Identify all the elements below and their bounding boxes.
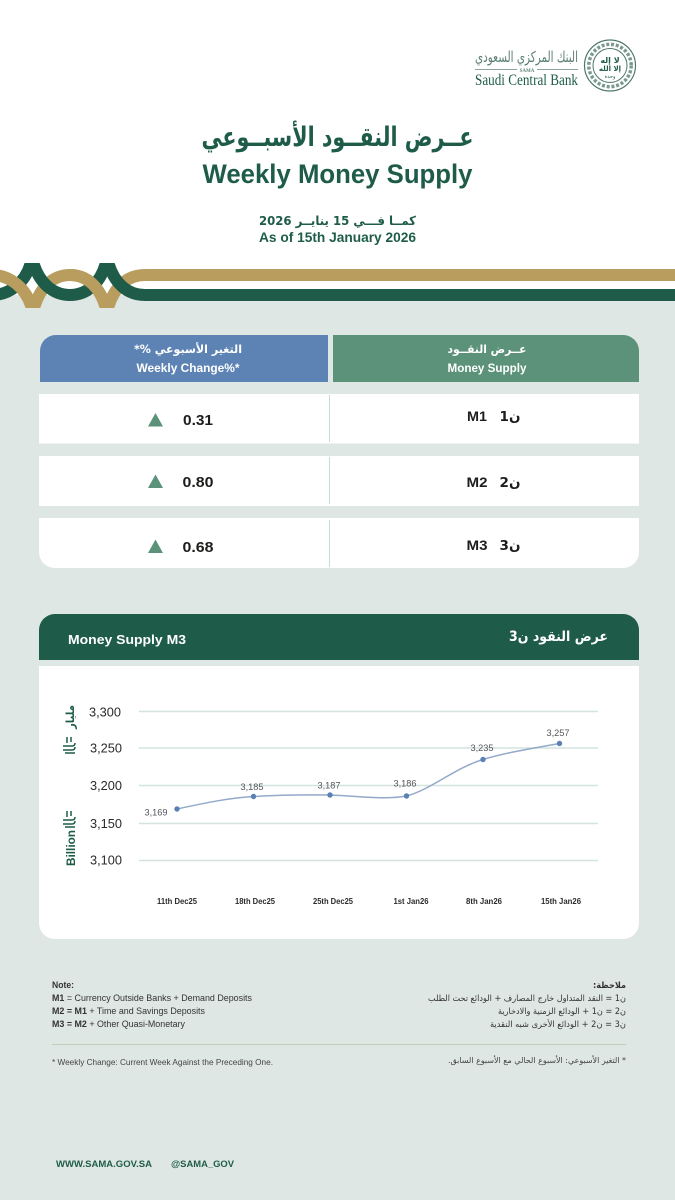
- note: Arabic: [428, 981, 626, 1030]
- grid lines and y labels: 3,150: [90, 816, 122, 831]
- chart header bar: عرض النقود ن3: [509, 629, 608, 645]
- date: As of 15th January 2026: [259, 230, 416, 245]
- data labels: [144, 728, 570, 818]
- table row: M1: 0.31: [183, 413, 213, 429]
- table row: M3: ن3: [500, 538, 520, 554]
- note: Arabic: ن2 = ن1 + الودائع الزمنية والادخارية: [498, 1007, 626, 1017]
- note: Arabic: ن1 = النقد المتداول خارج المصارف + الودائع تحت الطلب: [428, 994, 626, 1004]
- chart header bar: Money Supply M3: [68, 632, 186, 647]
- table header: money supply: [333, 335, 639, 382]
- logo: Saudi Central Bank: إلا الله: [599, 65, 621, 73]
- x axis labels: [157, 897, 582, 906]
- footer links: [56, 1159, 235, 1170]
- x axis labels: 11th Dec25: [157, 897, 198, 906]
- y axis title: مليار: [63, 705, 77, 730]
- grid lines and y labels: 3,200: [90, 778, 122, 793]
- footer links: @SAMA_GOV: [171, 1159, 235, 1170]
- y axis title: [63, 705, 78, 866]
- data labels: 3,257: [546, 728, 570, 739]
- data labels: 3,235: [470, 743, 494, 754]
- grid lines and y labels: 3,100: [90, 852, 122, 868]
- data line: [177, 744, 560, 809]
- data labels: 3,169: [144, 808, 168, 818]
- table header: money supply: Money Supply: [448, 363, 527, 375]
- footer links: WWW.SAMA.GOV.SA: [56, 1159, 152, 1170]
- x axis labels: 1st Jan26: [394, 897, 429, 906]
- panel: line chart: [39, 666, 639, 939]
- x axis labels: 15th Jan26: [541, 897, 582, 906]
- logo: Saudi Central Bank: Saudi Central Bank: [475, 72, 578, 89]
- grid lines and y labels: 3,300: [89, 704, 121, 720]
- note: English: M3 = M2 + Other Quasi-Monetary: [52, 1019, 185, 1029]
- table header: weekly change: Weekly Change%*: [136, 363, 240, 375]
- y axis title: Billion: [64, 830, 78, 866]
- table row: M1: ن1: [500, 409, 520, 425]
- icon: up triangle: [148, 474, 163, 488]
- data labels: 3,187: [318, 780, 340, 792]
- logo: Saudi Central Bank: البنك المركزي السعودي: [475, 48, 578, 67]
- note: English: [52, 980, 252, 1029]
- table row: M3: 0.68: [182, 540, 214, 556]
- note: English: M2 = M1 + Time and Savings Deposits: [52, 1006, 205, 1016]
- logo: Saudi Central Bank: [475, 40, 636, 91]
- table header: weekly change: التغير الأسبوعي %*: [134, 342, 242, 357]
- table row: M2: [39, 456, 639, 506]
- table row: M1: [39, 394, 639, 444]
- table row: M1: M1: [467, 409, 488, 424]
- logo: Saudi Central Bank: وحدة: [605, 74, 616, 80]
- logo: Saudi Central Bank: SAMA: [520, 69, 535, 74]
- table row: M2: 0.80: [182, 475, 214, 491]
- x axis labels: 8th Jan26: [466, 897, 503, 906]
- note: Arabic: ملاحظة:: [593, 981, 626, 991]
- table row: M3: M3: [466, 538, 488, 553]
- logo: Saudi Central Bank: لا إله: [600, 56, 620, 65]
- decorative woven ribbon: [0, 263, 675, 308]
- title: Weekly Money Supply: [202, 159, 472, 189]
- title: [202, 120, 474, 189]
- data points: [174, 741, 562, 812]
- grid lines and y labels: [89, 704, 598, 868]
- icon: up triangle: [148, 413, 163, 426]
- icon: up triangle: [148, 540, 163, 553]
- title: عــرض النقــود الأسبــوعي: [202, 120, 474, 153]
- chart header bar: [39, 614, 639, 660]
- footnote: Arabic: * التغير الأسبوعي: الأسبوع الحالي مع الأسبوع السابق.: [448, 1055, 626, 1065]
- note: English: M1 = Currency Outside Banks + Demand Deposits: [52, 993, 252, 1003]
- x axis labels: 18th Dec25: [235, 897, 276, 906]
- table row: M3: [39, 518, 639, 568]
- note: Arabic: ن3 = ن2 + الودائع الأخرى شبه النقدية: [490, 1019, 626, 1030]
- data labels: 3,186: [394, 778, 416, 790]
- table header: weekly change: [40, 335, 328, 382]
- grid lines and y labels: 3,250: [90, 740, 122, 756]
- date: [259, 213, 417, 245]
- table header: money supply: عــرض النقــود: [448, 342, 526, 357]
- table row: M2: M2: [466, 475, 488, 490]
- footnote: English: * Weekly Change: Current Week Against the Preceding One.: [52, 1057, 273, 1067]
- data labels: 3,185: [240, 782, 264, 793]
- note: English: Note:: [52, 980, 74, 990]
- table row: M2: ن2: [500, 475, 520, 491]
- date: كمــا فـــي 15 ينايــر 2026: [259, 213, 417, 228]
- x axis labels: 25th Dec25: [313, 897, 354, 906]
